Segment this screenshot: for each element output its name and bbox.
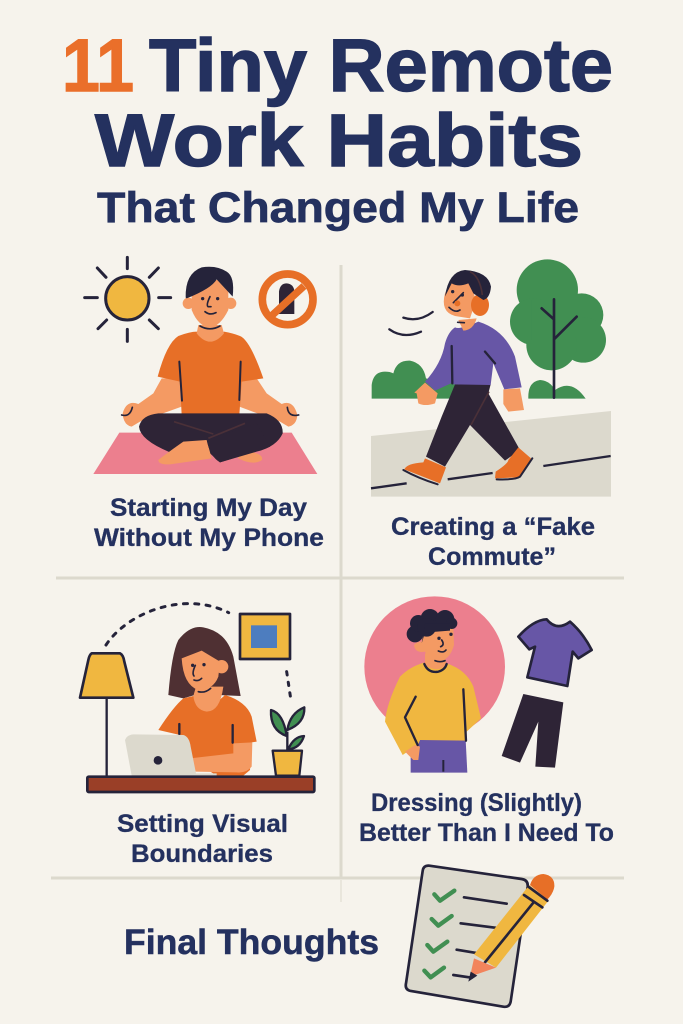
icon: sun xyxy=(85,257,171,341)
label: starting my day xyxy=(94,494,324,552)
title: Work Habits xyxy=(95,99,583,182)
icon: laptop xyxy=(125,734,217,776)
title: That Changed My Life xyxy=(97,184,579,232)
title xyxy=(62,24,613,232)
motion lines xyxy=(389,312,433,335)
icon: trousers xyxy=(502,694,563,768)
panel: starting my day without my phone xyxy=(85,257,324,552)
panel: setting visual boundaries xyxy=(80,604,314,868)
label: setting visual boundaries: Boundaries xyxy=(131,840,273,868)
icon: person walking outdoors xyxy=(371,259,611,497)
road xyxy=(371,411,611,497)
label: starting my day: Without My Phone xyxy=(94,524,324,552)
icon: woman at desk with lamp, frame and plant xyxy=(80,604,314,792)
title: 11 xyxy=(62,24,134,107)
yoga mat xyxy=(93,433,317,474)
title: Tiny Remote xyxy=(149,24,613,107)
label: setting visual boundaries xyxy=(117,810,288,868)
label: creating a fake commute: Commute” xyxy=(428,543,556,571)
label: setting visual boundaries: Setting Visual xyxy=(117,810,288,838)
heading: final thoughts: Final Thoughts xyxy=(124,923,379,962)
icon: picture frame xyxy=(240,614,290,659)
tree and bushes xyxy=(372,259,606,399)
icon: t-shirt xyxy=(518,619,592,686)
label: dressing slightly better: Better Than I Need To xyxy=(359,819,614,847)
icon: no phone sign xyxy=(262,274,313,325)
man in yellow sweater xyxy=(385,609,481,773)
panel: dressing slightly better xyxy=(359,596,614,847)
pink circle backdrop xyxy=(364,596,505,737)
desk xyxy=(87,777,314,792)
icon: potted plant xyxy=(271,707,304,776)
label: dressing slightly better xyxy=(359,789,614,847)
woman xyxy=(158,627,257,776)
label: dressing slightly better: Dressing (Slightly) xyxy=(371,789,582,817)
icon: meditating person with sun and no-phone sign xyxy=(85,257,317,474)
label: creating a fake commute xyxy=(391,513,595,571)
icon: man in sweater with clothes xyxy=(364,596,592,773)
icon: checklist and pencil xyxy=(406,866,554,1007)
walking person xyxy=(403,270,532,484)
pencil xyxy=(468,874,554,982)
label: creating a fake commute: Creating a “Fake xyxy=(391,513,595,541)
panel: creating a fake commute xyxy=(371,259,611,571)
meditating person xyxy=(122,267,299,464)
label: starting my day: Starting My Day xyxy=(110,494,307,522)
checklist xyxy=(406,866,528,1007)
icon: floor lamp xyxy=(80,653,133,777)
dashed boundary lines xyxy=(106,604,291,698)
